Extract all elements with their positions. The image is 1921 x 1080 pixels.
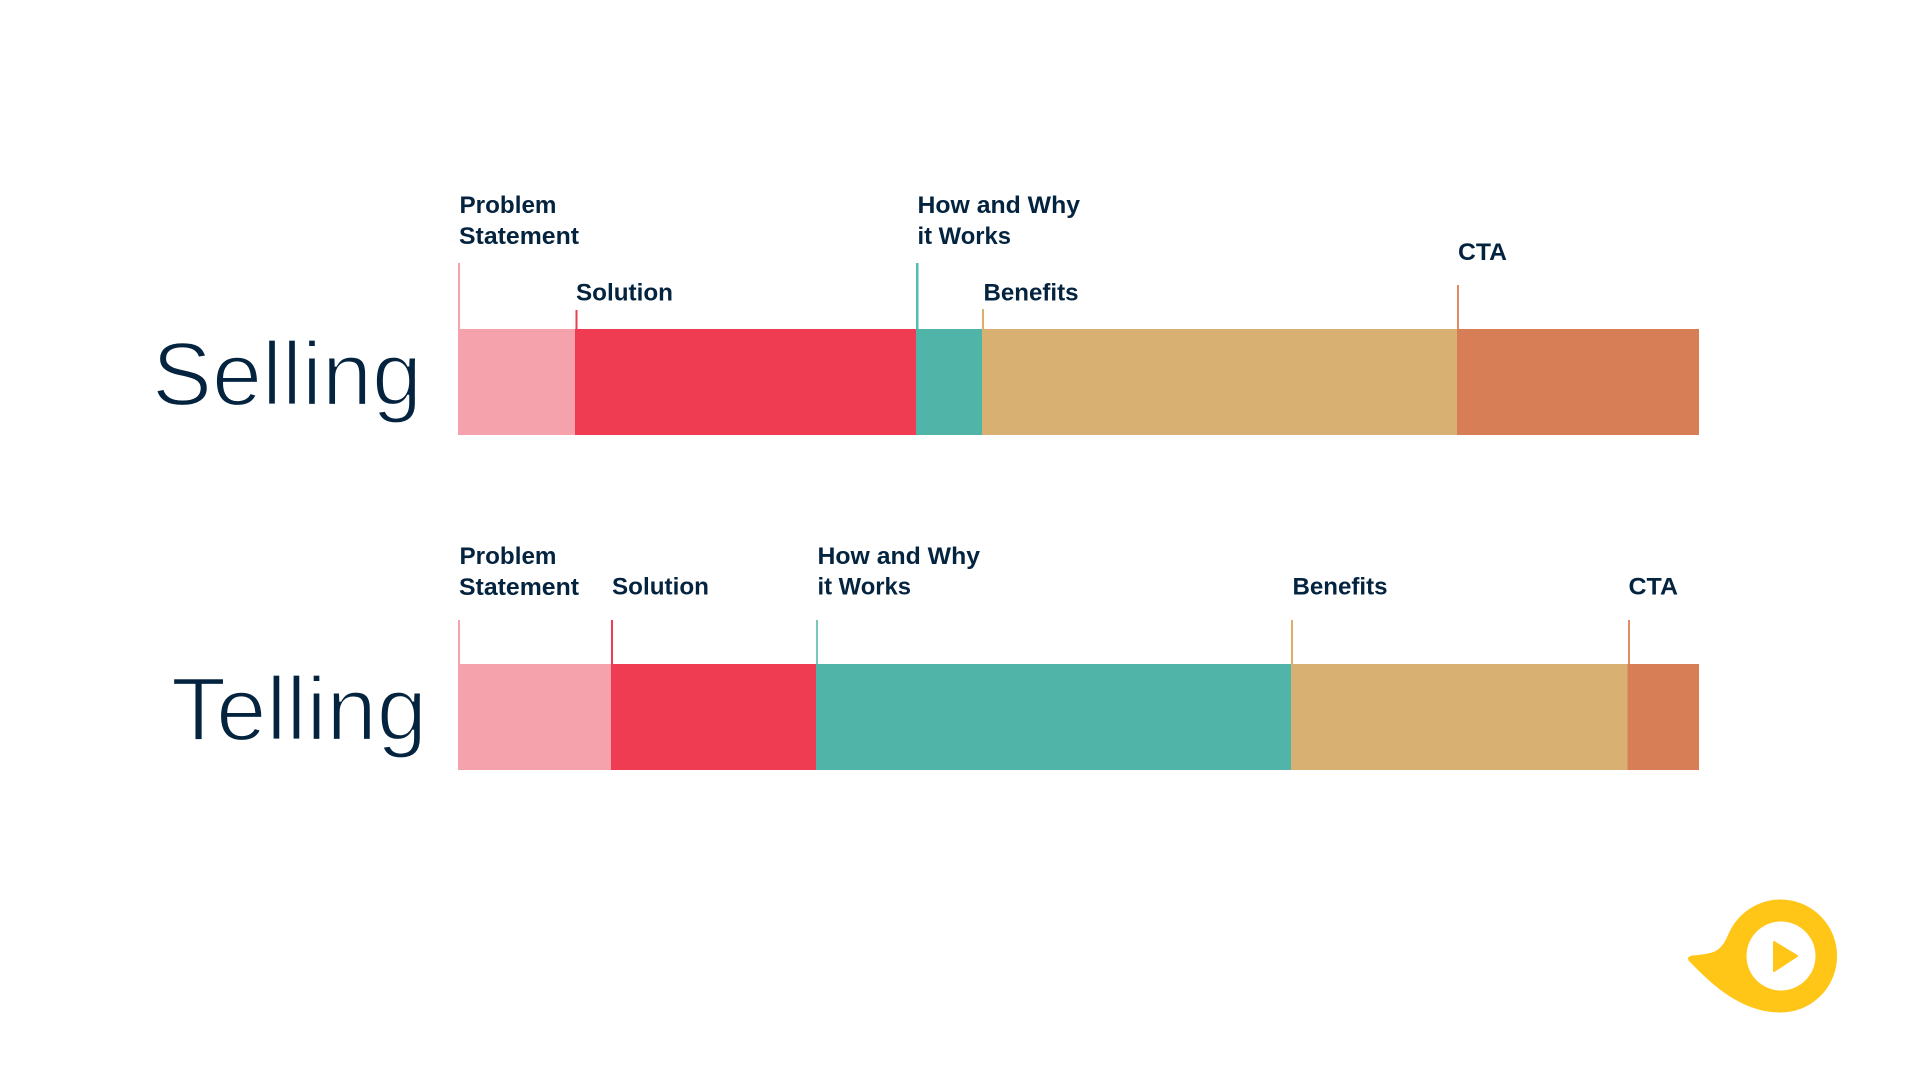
heading: Telling: Telling	[171, 660, 427, 760]
label: Solution: Solution	[612, 574, 709, 600]
row: Telling	[171, 543, 1699, 770]
heading: Selling: Selling	[152, 325, 422, 425]
label: Solution: Solution	[576, 280, 673, 306]
label: CTA: CTA	[1628, 574, 1678, 600]
label: Problem Statement	[458, 543, 579, 664]
bar: Selling segments	[458, 329, 1699, 435]
row: Selling	[152, 192, 1699, 435]
label: Solution	[611, 574, 709, 664]
icon: yellow speech-bubble play logo	[1688, 900, 1837, 1013]
label: Problem Statement: Problem	[460, 192, 556, 219]
label: How and Why it Works: How and Why	[818, 543, 980, 570]
label: CTA	[1628, 574, 1678, 664]
bar: Telling segments	[458, 664, 1699, 770]
label: Problem Statement: Statement	[459, 574, 579, 601]
label: How and Why it Works: How and Why	[918, 192, 1080, 219]
label: Benefits: Benefits	[984, 280, 1078, 306]
label: Problem Statement: Problem	[460, 543, 556, 570]
label: Problem Statement	[458, 192, 579, 329]
label: Benefits	[982, 280, 1078, 329]
label: Benefits: Benefits	[1292, 574, 1388, 600]
label: How and Why it Works: it Works	[818, 574, 911, 600]
label: Problem Statement: Statement	[459, 223, 579, 250]
label: CTA: CTA	[1458, 239, 1507, 266]
label: How and Why it Works: it Works	[918, 223, 1011, 250]
label: CTA	[1457, 239, 1507, 329]
label: Solution	[576, 280, 673, 329]
label: How and Why it Works	[816, 543, 980, 664]
label: Benefits	[1291, 574, 1388, 664]
label: How and Why it Works	[916, 192, 1080, 329]
